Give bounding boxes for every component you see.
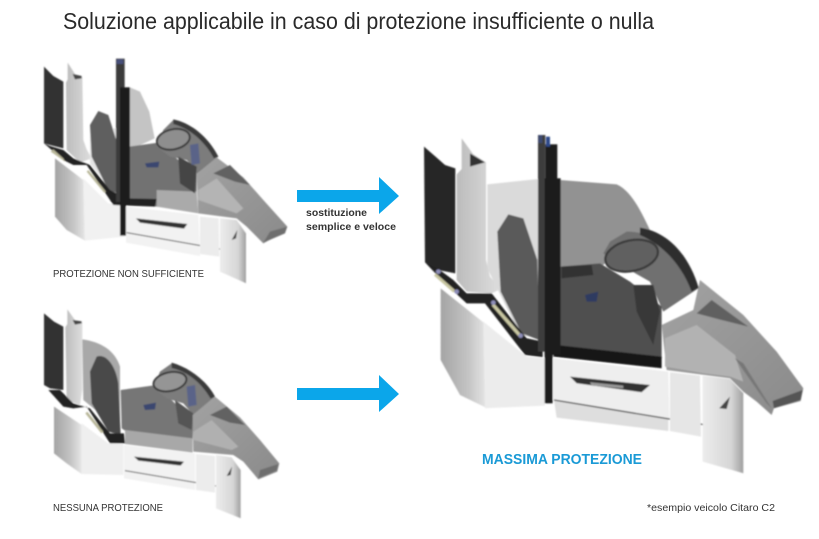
instrument console xyxy=(153,363,215,415)
front panels xyxy=(126,207,200,256)
illustration: cab with insufficient protection xyxy=(44,59,287,283)
left rear base xyxy=(55,158,85,241)
front door xyxy=(216,455,241,518)
rear glass shield xyxy=(487,179,538,338)
arrow caption xyxy=(306,207,396,233)
left rear base xyxy=(54,407,82,474)
black door panel xyxy=(44,67,63,148)
light pillar xyxy=(65,309,82,405)
floor step xyxy=(44,143,157,207)
hood xyxy=(662,280,803,415)
front panels xyxy=(553,358,669,418)
partition post xyxy=(116,59,125,202)
illustration: cab with maximum protection xyxy=(424,135,803,473)
label: maximum protection: MASSIMA PROTEZIONE xyxy=(482,452,642,468)
arrow caption: semplice e veloce xyxy=(306,221,396,233)
front panels xyxy=(124,445,195,490)
dashboard area xyxy=(129,143,197,207)
rear shield xyxy=(82,339,120,430)
arrow caption: sostituzione xyxy=(306,207,367,219)
floor step xyxy=(425,262,543,357)
front door xyxy=(220,218,246,283)
floor step xyxy=(48,390,125,443)
seat xyxy=(90,111,118,193)
rear glass shield xyxy=(130,87,155,150)
footnote: *esempio veicolo Citaro C2 xyxy=(647,502,775,514)
title: Soluzione applicabile in caso di protezione insufficiente o nulla xyxy=(63,8,654,34)
seat xyxy=(90,356,121,435)
black door panel xyxy=(44,313,63,390)
illustration: cab with no protection xyxy=(44,309,279,518)
light pillar xyxy=(66,63,92,163)
dashboard xyxy=(121,385,193,440)
arrow: bottom blue arrow xyxy=(297,375,399,412)
console xyxy=(603,232,698,312)
instrument console xyxy=(157,120,218,174)
light pillar xyxy=(457,138,501,293)
seat xyxy=(497,214,539,340)
black door panel xyxy=(424,147,455,273)
cab floor edge xyxy=(553,345,662,368)
left rear base xyxy=(441,288,487,408)
label: no protection: NESSUNA PROTEZIONE xyxy=(53,502,163,514)
front door xyxy=(703,376,743,473)
glass shield: upper xyxy=(560,180,651,268)
arrow: top blue arrow xyxy=(297,177,399,214)
hood xyxy=(197,157,287,243)
partition post xyxy=(538,135,545,352)
dashboard under glass xyxy=(560,263,662,358)
label: insufficient protection: PROTEZIONE NON SUFFICIENTE xyxy=(53,268,204,280)
hood xyxy=(193,397,279,479)
